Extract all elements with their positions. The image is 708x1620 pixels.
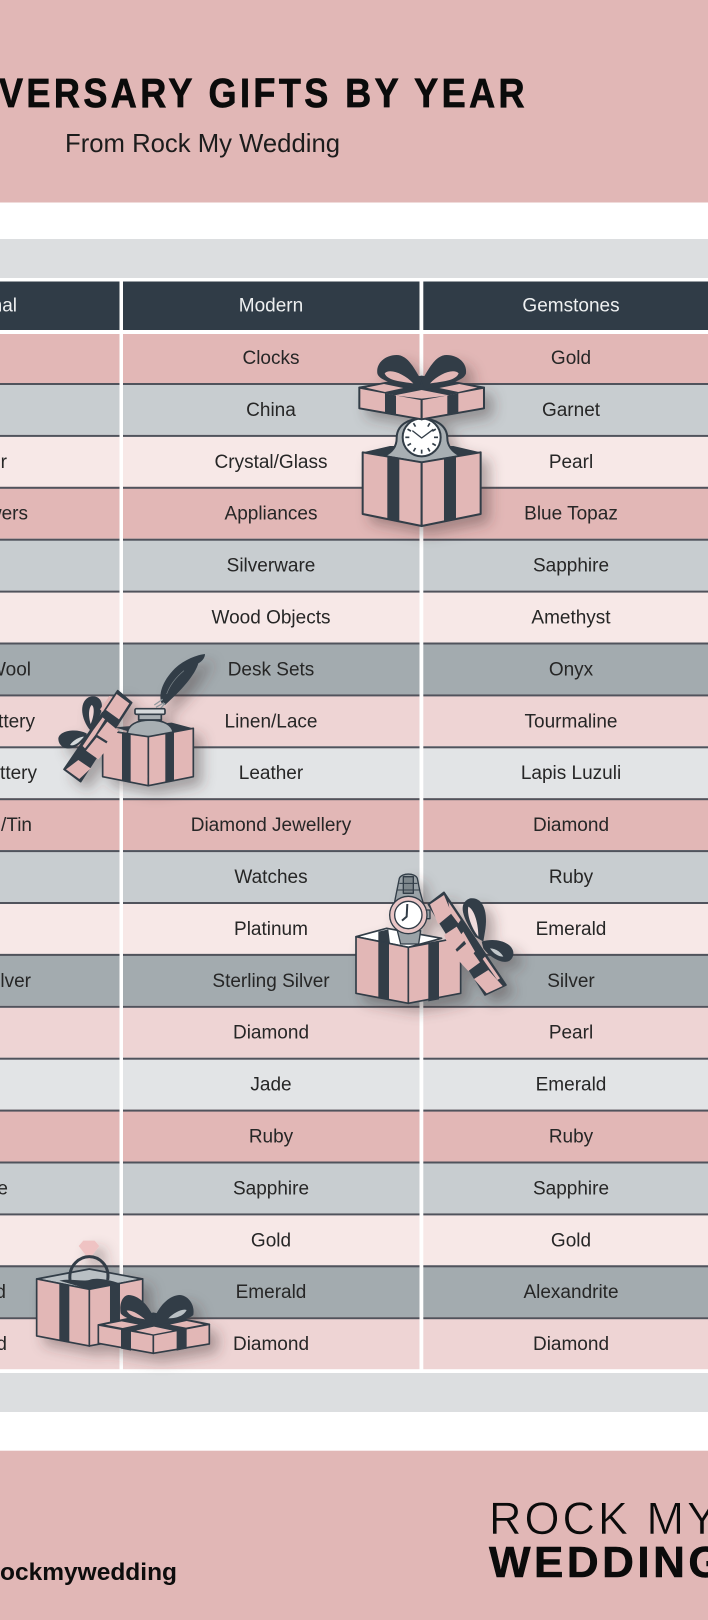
row 8: Tourmaline: [525, 711, 617, 732]
row 14: Pearl: [549, 1023, 593, 1044]
row 5: Silverware: [227, 556, 315, 577]
row 17: Sapphire: [533, 1178, 609, 1199]
watch: [390, 874, 430, 944]
row 4: Blue Topaz: [524, 504, 618, 525]
row 6: Amethyst: [531, 608, 611, 628]
tall box interior: [37, 1269, 143, 1289]
icon: clock in gift box: [359, 355, 484, 526]
icon: watch in gift box: [356, 874, 513, 1003]
header row: Gemstones: [522, 296, 620, 316]
lid: [359, 377, 484, 419]
row 1: Gold: [551, 348, 591, 369]
row 2: [0, 383, 708, 435]
ring: [70, 1257, 108, 1280]
row 11: Ruby: [549, 867, 594, 888]
row 15: Jade: [250, 1075, 292, 1096]
row 19: Emerald: [236, 1282, 306, 1303]
box interior: [363, 446, 481, 463]
row 3: [0, 435, 708, 487]
row 18: Gold: [251, 1230, 291, 1251]
row 20: [0, 1317, 708, 1369]
row 8: Linen/Lace: [225, 711, 317, 732]
box interior: [115, 723, 193, 737]
box body: [363, 452, 481, 526]
header band: [0, 0, 708, 202]
row 16: Ruby: [249, 1126, 294, 1148]
row 15: Emerald: [536, 1075, 606, 1096]
small box: [98, 1313, 209, 1353]
row 14: Diamond: [233, 1023, 309, 1044]
row 13: Silver: [547, 971, 595, 992]
diamond: [79, 1241, 99, 1259]
box body: [103, 728, 193, 786]
icon: inkwell and feather in gift box: [58, 654, 205, 786]
tall box body: [37, 1279, 143, 1346]
row 10: [0, 798, 708, 850]
row 12: Emerald: [536, 919, 606, 940]
row 5: [0, 539, 708, 591]
row 6: Wood Objects: [212, 608, 330, 628]
bow: [58, 696, 102, 748]
lid with bow: [58, 691, 132, 782]
clock body: [384, 419, 461, 463]
bottom grey band: [0, 1373, 708, 1412]
row 13: [0, 954, 708, 1006]
box body: [356, 937, 461, 1003]
row 3: Pearl: [549, 452, 593, 473]
row 13: Sterling Silver: [212, 971, 330, 992]
row 11: [0, 850, 708, 902]
footer band: [0, 1451, 708, 1620]
row 7: [0, 642, 708, 694]
bow: [377, 355, 466, 390]
row 19: Alexandrite: [523, 1282, 619, 1303]
row 10: Diamond: [533, 815, 609, 836]
icon: ring in gift boxes: [37, 1241, 209, 1353]
header row: Modern: [239, 296, 303, 316]
row 16: [0, 1110, 708, 1162]
row 8: [0, 694, 708, 746]
row 18: Gold: [551, 1230, 591, 1251]
row 17: [0, 1162, 708, 1214]
top grey band: [0, 239, 708, 278]
row 2: Garnet: [542, 400, 601, 421]
subtitle: From Rock My Wedding: [65, 130, 340, 158]
table: [0, 278, 708, 1373]
ink bottle: [127, 709, 173, 737]
row 20: Diamond: [233, 1334, 309, 1355]
bow: [463, 898, 513, 962]
row 4: [0, 487, 708, 539]
row 6: [0, 591, 708, 643]
row 1: Clocks: [242, 348, 300, 369]
row 20: Diamond: [533, 1334, 609, 1355]
row 5: Sapphire: [533, 556, 609, 577]
lid with bow: [428, 892, 513, 995]
row 10: Diamond Jewellery: [191, 815, 352, 836]
row 18: [0, 1213, 708, 1265]
row 19: [0, 1265, 708, 1317]
logo: [489, 1493, 708, 1587]
row 4: Appliances: [225, 504, 317, 525]
row 2: China: [246, 400, 296, 421]
row 17: Sapphire: [233, 1178, 309, 1199]
row 12: [0, 902, 708, 954]
row 7: Desk Sets: [228, 659, 314, 680]
row 15: [0, 1058, 708, 1110]
row 3: Crystal/Glass: [215, 452, 327, 473]
row 16: Ruby: [549, 1126, 594, 1148]
row 12: Platinum: [234, 919, 308, 940]
row 1: [0, 334, 708, 383]
row 11: Watches: [234, 867, 308, 888]
row 14: [0, 1006, 708, 1058]
row 7: Onyx: [549, 659, 594, 680]
bow: [120, 1295, 194, 1325]
header row: [0, 282, 708, 330]
row 9: [0, 746, 708, 798]
row 9: Leather: [239, 763, 304, 784]
feather: [154, 654, 205, 710]
clock face: [403, 418, 441, 456]
box interior: [356, 928, 442, 947]
row 9: Lapis Luzuli: [521, 763, 621, 784]
